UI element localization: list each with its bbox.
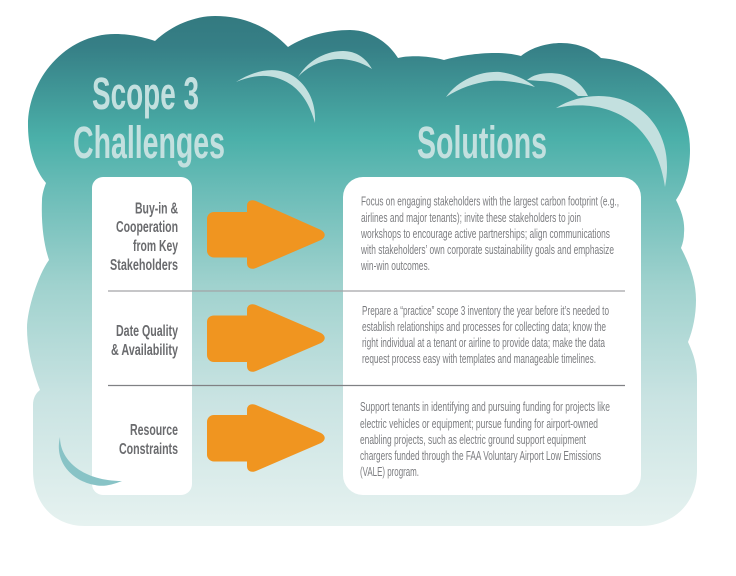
arrow 1 [207,200,325,269]
solution text 2: request process easy with templates and manageable timelines. [362,352,596,366]
cloud highlight crescents [236,51,667,187]
challenge label: Data Quality [111,323,178,359]
challenge label: Buy-in and Cooperation: from Key [133,238,178,255]
challenge label: Buy-in and Cooperation: Cooperation [116,219,178,236]
challenge label: Buy-in and Cooperation [110,200,178,274]
solution text 3: electric vehicles or equipment; pursue funding for airport-owned [360,417,598,431]
row divider 2 [108,384,625,386]
solution text 1: airlines and major tenants); invite these stakeholders to join [361,211,581,225]
solution text 3: (VALE) program. [360,465,419,479]
title: Scope 3 Challenges: Scope 3 [92,68,199,119]
title: Solutions: Solutions [417,117,547,168]
solution text 3 [360,400,610,479]
challenge label: Buy-in and Cooperation: Buy-in & [135,200,178,218]
solution text 3: chargers funded through the FAA Voluntary Airport Low Emissions [360,449,601,463]
solution text 1: win-win outcomes. [360,259,430,273]
crescent: lower left [59,437,122,486]
solution text 2: Prepare a “practice” scope 3 inventory the year before it’s needed to [362,304,609,318]
panel: solutions [343,177,641,495]
solution text 1 [360,194,619,273]
solution text 1: with stakeholders’ own corporate sustainability goals and emphasize [360,243,614,257]
arrow 2 [207,304,325,372]
solution text 3: Support tenants in identifying and pursuing funding for projects like [360,400,610,414]
challenge label: Data Quality: & Availability [111,342,178,359]
challenge label: Data Quality: Date Quality [116,323,178,340]
solution text 2 [362,304,609,366]
arrow 3 [207,404,325,472]
challenge label: Buy-in and Cooperation: Stakeholders [110,257,178,274]
solution text 1: workshops to encourage active partnerships; align communications [360,227,610,241]
title: Scope 3 Challenges: Challenges [73,117,225,168]
solution text 3: enabling projects, such as electric ground support equipment [360,433,586,447]
solution text 2: right individual at a tenant or airline to provide data; make the data [362,336,605,350]
challenge label: Resource Constraints: Resource [130,422,178,439]
challenge label: Resource Constraints [119,422,178,458]
solution text 2: establish relationships and processes for collecting data; know the [362,320,606,334]
row divider 1 [108,290,625,292]
challenge label: Resource Constraints: Constraints [119,441,178,458]
panel: challenges [92,177,192,495]
title: Scope 3 Challenges [73,68,225,168]
